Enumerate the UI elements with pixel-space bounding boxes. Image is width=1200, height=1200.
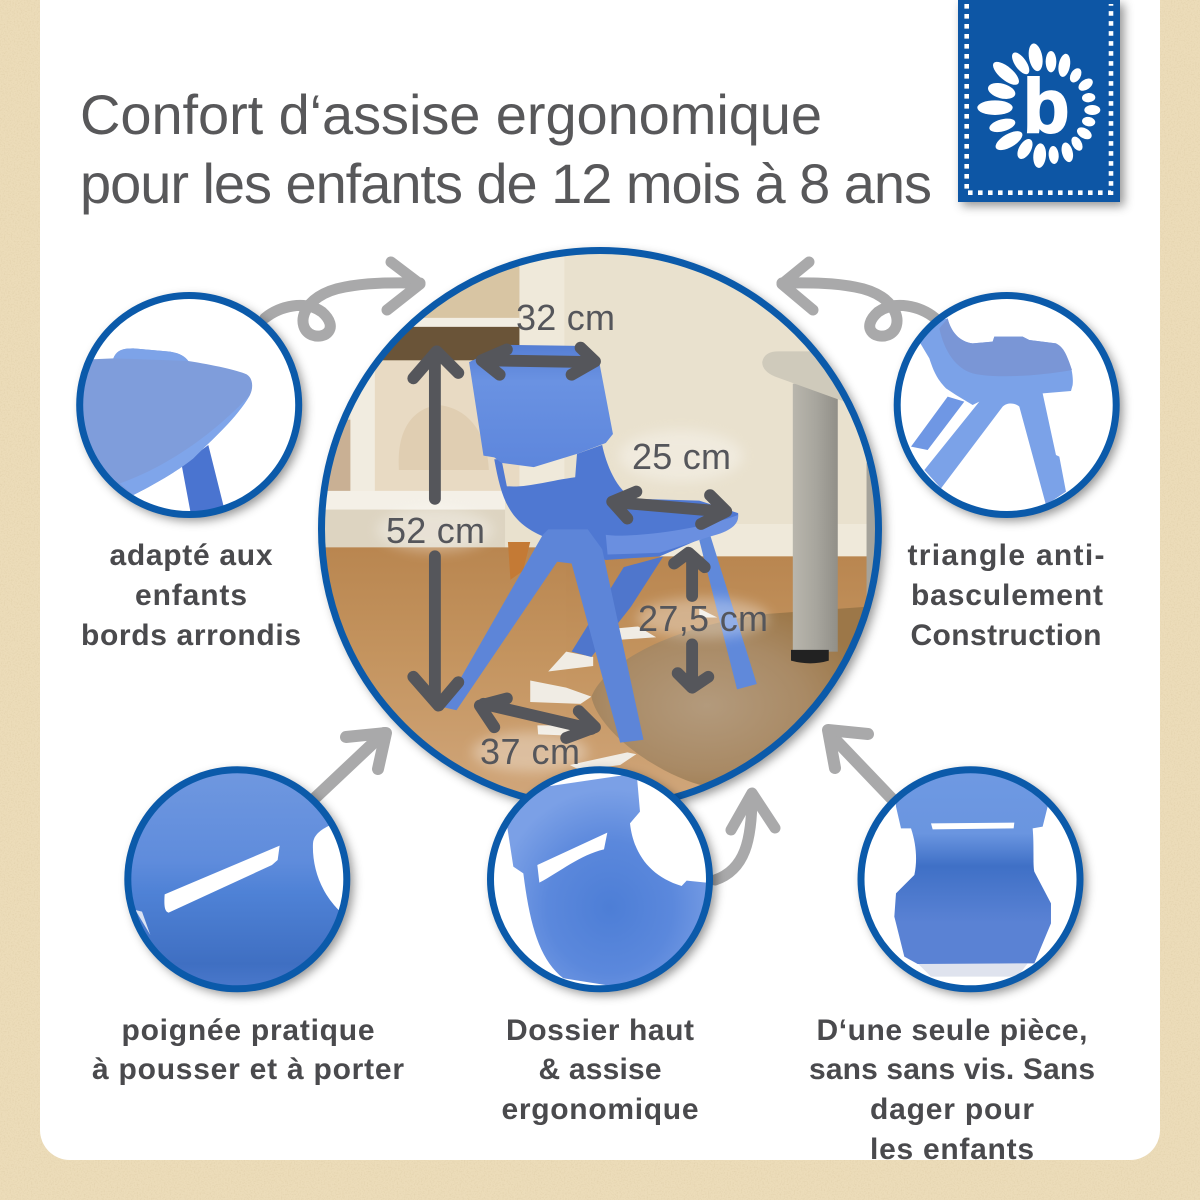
caption: backrest: ergonomique [502,1093,698,1126]
detail circle: handle [117,760,357,1000]
detail circle: high backrest [488,767,713,991]
caption: one piece: dager pour [870,1093,1034,1126]
caption: one piece: les enfants [870,1133,1034,1166]
rug [591,607,867,787]
caption: one piece: sans sans vis. Sans [809,1053,1095,1086]
main photo circle [311,240,894,823]
title: pour les enfants de 12 mois à 8 ans [80,152,932,215]
arrow: bottom right [828,730,893,800]
caption: rounded edges: enfants [135,579,247,612]
detail circle: one piece seat [858,760,1082,991]
dimension: 25 cm: 25 cm [632,436,731,477]
caption: backrest: Dossier haut [506,1014,694,1047]
caption: rounded edges [81,539,301,652]
table [793,384,838,652]
caption: handle: à pousser et à porter [92,1053,404,1086]
dimension: 32 cm: 32 cm [516,297,615,338]
caption: anti-tip triangle: triangle anti- [908,539,1104,572]
caption: one piece: D‘une seule pièce, [816,1014,1088,1047]
caption: rounded edges: bords arrondis [81,619,301,652]
caption: one piece [809,1014,1095,1166]
caption: handle [92,1014,404,1086]
dimension: 52 cm: 52 cm [386,510,485,551]
dimension arrows [413,348,726,738]
title [80,83,932,215]
tassels [530,608,717,770]
caption: backrest [502,1014,698,1126]
chair [572,556,663,657]
main circle ring [322,250,878,808]
caption: anti-tip triangle: basculement [911,579,1103,612]
arrow: bottom centre [715,793,775,880]
brand logo tag: b [1023,64,1069,149]
arrow: top right [782,262,935,336]
caption: backrest: & assise [538,1053,662,1086]
detail circle: seat edge [77,293,301,518]
caption: handle: poignée pratique [122,1014,374,1047]
dimension: 37 cm: 37 cm [480,731,580,772]
caption: anti-tip triangle [908,539,1104,652]
title: Confort d‘assise ergonomique [80,83,822,146]
arrow: top left [265,262,420,336]
caption: rounded edges: adapté aux [110,539,273,572]
dimension: 27,5 cm: 27,5 cm [638,598,768,639]
room photo with blue chair [325,254,875,794]
text halos [377,430,769,772]
arrow: bottom left [315,733,386,798]
brand logo tag [958,0,1120,202]
caption: anti-tip triangle: Construction [910,619,1102,652]
detail circle: anti-tip triangle [895,293,1119,517]
